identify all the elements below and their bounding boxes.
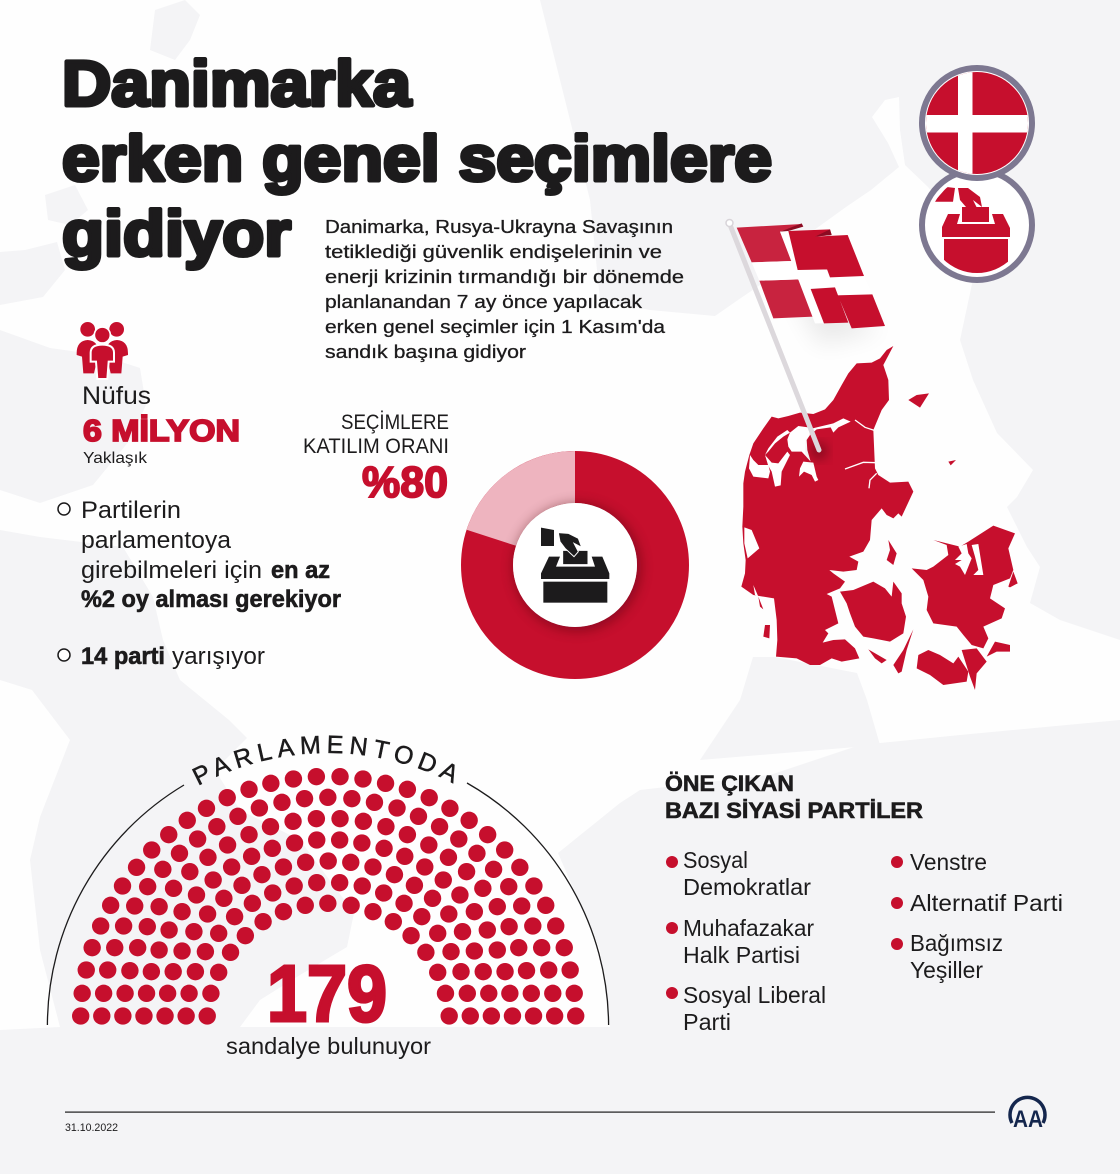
- title: Danimarka: [62, 48, 411, 120]
- bullet list: 14 parti: [81, 643, 165, 670]
- parties list: Venstre: [910, 849, 987, 875]
- intro paragraph: erken genel seçimler için 1 Kasım'da: [325, 316, 666, 337]
- flag on pole: [726, 220, 885, 458]
- intro paragraph: [325, 216, 684, 362]
- logo: AA: [1010, 1097, 1045, 1133]
- flag pole: [730, 224, 819, 450]
- parties list: [666, 847, 1063, 1035]
- Funen: [840, 582, 906, 642]
- Jutland: [741, 346, 913, 665]
- bullet list: yarışıyor: [172, 643, 265, 670]
- parties list: Bağımsız: [910, 930, 1003, 956]
- note: Yaklaşık: Yaklaşık: [83, 450, 148, 467]
- bullet list: en az: [271, 557, 330, 584]
- title: erken genel seçimlere: [62, 122, 772, 194]
- parties list: Alternatif Parti: [910, 890, 1063, 916]
- value: 6 MİLYON: 6 MİLYON: [83, 413, 240, 448]
- turnout label: SEÇİMLERE: [341, 411, 449, 434]
- intro paragraph: Danimarka, Rusya-Ukrayna Savaşının: [325, 216, 673, 237]
- parties list: Muhafazakar: [683, 915, 814, 941]
- parties heading: BAZI SİYASİ PARTİLER: [665, 798, 923, 823]
- Zealand: [912, 526, 1015, 648]
- icon: ballot box: [541, 528, 609, 603]
- islands: [758, 393, 1018, 690]
- intro paragraph: sandık başına gidiyor: [325, 341, 526, 362]
- parties list: Parti: [683, 1009, 731, 1035]
- turnout label: %80: [362, 458, 448, 507]
- bullet list: girebilmeleri için: [81, 557, 262, 584]
- Limfjord: [749, 455, 770, 478]
- population block: [77, 322, 240, 467]
- parties heading: [665, 771, 923, 823]
- label: Nüfus: Nüfus: [82, 382, 151, 410]
- map of Denmark: [741, 346, 1018, 690]
- intro paragraph: tetiklediği güvenlik endişelerinin ve: [325, 241, 662, 262]
- title: gidiyor: [62, 198, 291, 270]
- footer: 31.10.2022: [65, 1122, 118, 1134]
- seat count: [226, 949, 431, 1059]
- parties list: Sosyal Liberal: [683, 982, 826, 1008]
- parties list: Yeşiller: [910, 957, 983, 983]
- icon: Danish flag circle: [920, 66, 1034, 285]
- parties list: Demokratlar: [683, 874, 811, 900]
- parties list: Halk Partisi: [683, 942, 800, 968]
- parliament arc and heading: [46, 735, 610, 1025]
- turnout label: KATILIM ORANI: [303, 435, 449, 458]
- parliament seats: [72, 768, 584, 1025]
- parliament arc and heading: PARLAMENTODA: [192, 735, 455, 786]
- icon: ballot box in circle: [935, 187, 1010, 273]
- intro paragraph: enerji krizinin tırmandığı bir dönemde: [325, 266, 684, 287]
- parties list: Sosyal: [683, 847, 748, 873]
- bullet list: [58, 497, 341, 670]
- title: [62, 48, 772, 270]
- icon: people: [77, 322, 128, 379]
- turnout label: [303, 411, 449, 507]
- bullet list: %2 oy alması gerekiyor: [81, 586, 341, 613]
- seat count: 179: [267, 949, 387, 1038]
- donut chart: [467, 451, 663, 653]
- logo: AA: AA: [1013, 1106, 1043, 1133]
- seat count: sandalye bulunuyor: [226, 1033, 431, 1059]
- bullet list: parlamentoya: [81, 527, 232, 554]
- bullet list: Partilerin: [81, 497, 181, 524]
- parties heading: ÖNE ÇIKAN: [665, 771, 794, 796]
- intro paragraph: planlanandan 7 ay önce yapılacak: [325, 291, 643, 312]
